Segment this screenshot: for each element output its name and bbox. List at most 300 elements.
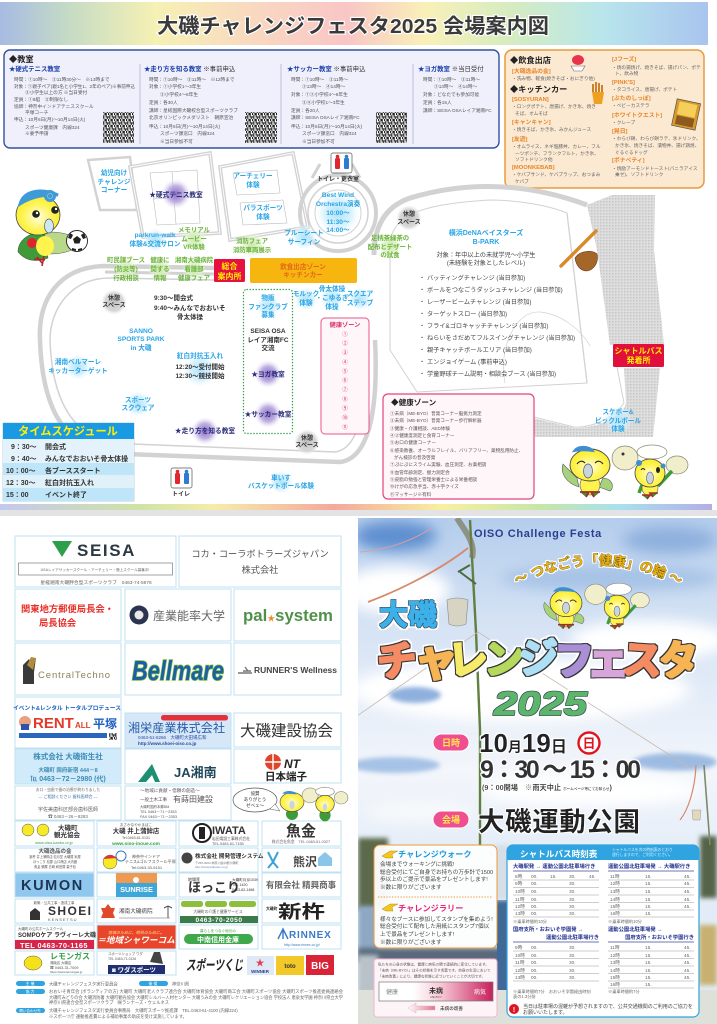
kitchen car heading: ◆キッチンカー xyxy=(510,85,567,94)
logo: Shinkine: 新杵 xyxy=(278,902,325,922)
table: Oiso station to park: 大磯駅発 → 運動公園北駐車場行き xyxy=(513,862,595,870)
health zone list: ②未病（ME-BYO）普発コーナー歩行解析器 xyxy=(390,417,482,424)
logo: Sports Toto group: スポーツくじ xyxy=(186,957,243,973)
table: park to Kofu branch: 45. xyxy=(684,945,691,950)
poster panel: challenge walk and rally xyxy=(374,845,497,948)
class: running xyxy=(144,64,238,145)
map label: tea and dessert: 足柄茶緑茶の xyxy=(371,233,409,242)
baseball stands xyxy=(587,195,664,345)
timetable note: シャトルバスを次の時刻表のとおり xyxy=(612,847,673,852)
map label: rest space 2: 休憩 xyxy=(301,434,313,442)
poster: Oiso title: 大磯 xyxy=(379,599,437,632)
logo: Shoei Sangyo: 0463-61-6266 大磯町大田場広和 xyxy=(138,734,207,741)
logo: Uokin xyxy=(272,822,330,844)
class: soccer: ②④小学校1〜3年生 xyxy=(302,99,345,106)
table: Oiso station to park: 9時 xyxy=(515,881,523,886)
map label: infant challenge corner xyxy=(98,168,131,194)
B-PARK activities list: ・ xyxy=(419,335,425,342)
table: Kofu branch to park: 10時 xyxy=(515,953,525,958)
logo: Oiso specialties association xyxy=(29,847,81,869)
health zone heading: ◆健康ゾーン xyxy=(391,397,437,407)
food heading: ◆飲食出店 xyxy=(510,55,551,65)
baseball ground xyxy=(374,187,624,427)
class: tennis: 時間：①10時〜 ②11時30分〜 ※13時まで xyxy=(14,76,110,83)
credit: organizer: 神奈川県 xyxy=(172,980,190,988)
logo: Kaihatsu Kanri System: http://www.kaihatsu.co.jp xyxy=(195,865,228,869)
logo: Rent All Hiratsuka: イベント&レンタル トータルプロデュース xyxy=(13,704,121,712)
credit: contact: ※スポーツ庁 運動推進費による補助事業の助成を受け実施しています。 xyxy=(49,1013,187,1020)
poster: Challenge Festa title xyxy=(375,636,701,686)
logo: Central Techno xyxy=(23,657,111,684)
map label: Bellmare kick target xyxy=(48,354,108,380)
table: park to Kofu branch: 13時 xyxy=(610,960,620,965)
poster panel: ME-BYO: 私たちの心身の状態は、健康と病気の間で連続的に変化しています。 xyxy=(378,962,489,966)
schedule heading: タイムスケジュール xyxy=(18,425,118,438)
class: running: 時間：①10時〜 ②11時〜 ※12時まで xyxy=(149,76,235,83)
logo: Chunan Shinkin xyxy=(184,928,253,944)
logo: Lemon Gas xyxy=(24,951,90,974)
table: Oiso station to park: 10時 xyxy=(515,889,525,894)
map label: fire fair xyxy=(233,232,272,258)
table: Oiso station to park: 11時 xyxy=(515,897,525,902)
map label: archery: 体験 xyxy=(246,180,260,189)
table: park to Oiso station: 16時 xyxy=(610,911,620,916)
panel: food and kitchen cars: ・オムライス、ネギ塩豚丼、カレー、フル xyxy=(512,143,601,150)
health zone list: ①未病（ME-BYO）普発コーナー脳挑力測定 xyxy=(390,410,482,417)
sponsor: Makita Kensetsu: 有蒔田建設 xyxy=(173,794,213,804)
map label: hospital fair xyxy=(175,255,214,282)
table: Oiso station to park: 00. xyxy=(531,881,538,886)
logo: Shoei Sangyo: http://www.shoei-oiso.co.jp xyxy=(138,741,197,746)
logo: Rent All Hiratsuka xyxy=(13,704,121,740)
logo: Iwata: TEL.0463-61-7155 xyxy=(212,842,244,846)
poster: venue: 会場 xyxy=(442,814,460,825)
mascots thanks bubble xyxy=(233,787,348,821)
table: park to Kofu branch: 16時 xyxy=(610,982,620,987)
logo: Sports Toto group: BIG xyxy=(311,961,329,972)
schedule rows: 15：00 xyxy=(6,492,29,499)
logo: Runner's Wellness: RUNNER'S Wellness xyxy=(254,665,337,675)
table: park to Oiso station: 13時 xyxy=(610,889,620,894)
poster: Challenge Festa title: タ xyxy=(657,637,701,685)
table: Kofu branch to park: 30. xyxy=(569,975,576,980)
class: tennis: ★硬式テニス教室 xyxy=(9,64,61,73)
poster: Challenge Festa title: ン xyxy=(484,638,524,682)
schedule rows: イベント終了 xyxy=(45,490,87,499)
map label: bottom toilet: トイレ xyxy=(172,491,190,498)
bamboo pole and streamers xyxy=(357,518,710,846)
map label: Bellmare kick target: キッカーターゲット xyxy=(48,366,108,375)
map panel: health zone numbers: ⑩ xyxy=(342,414,348,422)
traffic warning: お願いいたします。 xyxy=(523,1009,568,1016)
map label: opening ceremony times: 骨太体操 xyxy=(177,312,204,321)
map panel: health zone numbers: ⑧ xyxy=(342,395,348,403)
logo: Kumazawa xyxy=(268,852,332,869)
map label: parkrun: 体験&交流サロン xyxy=(130,239,181,248)
map label: para sports xyxy=(243,204,283,221)
table: park to Kofu branch: 国府支所・おおいそ学園行き xyxy=(625,933,694,941)
credit: organizer: 主 催 xyxy=(25,980,35,986)
map zone: green dotted area: 物販 xyxy=(261,293,275,302)
logo: Hokkori: 0463-62-1488 xyxy=(232,888,254,892)
logo: Oiso tourism association xyxy=(22,823,80,845)
time note: (9：00開場 ※雨天中止 ホームページ等にてお知らせ) xyxy=(482,783,612,792)
class: tennis: 協師：神奈中インドアテニススクール xyxy=(14,103,94,110)
map label: rest space 1: スペース xyxy=(102,302,126,309)
table: Oiso station to park: 8時 xyxy=(515,874,523,879)
B-PARK activities list: ・ xyxy=(419,347,425,354)
B-PARK activities list: ボールをつなごうダッシュチャレンジ (当日参加) xyxy=(427,286,563,294)
poster: venue xyxy=(433,807,640,837)
table: park to Oiso station: 45. xyxy=(684,881,691,886)
map label: bone exercise xyxy=(316,284,349,311)
walk text: 歩以上のご提示で景品をプレゼントします! xyxy=(380,875,488,883)
panel: food and kitchen cars: ・焼励アーモンドトースト(バニラアイス xyxy=(612,165,698,172)
map panel: health zone numbers: ⑦ xyxy=(342,386,348,394)
map label: skateboard and pickleball: スケボー& xyxy=(602,407,634,416)
logo: NT Nihon Tanshi xyxy=(265,754,307,783)
logo: Shoei Sangyo xyxy=(128,715,228,746)
map label: skateboard and pickleball: 体験 xyxy=(611,424,625,433)
sponsor: dental association: ― ご相談ください 歯科医師会 ― xyxy=(38,793,98,799)
sponsor: dental association: お口・虫歯で歯の治療が終わりました xyxy=(36,787,100,792)
logo: Sompo Care: 大磯町の公共ホームスクール xyxy=(18,926,64,931)
lower stands xyxy=(533,368,660,437)
logo: Oiso Eiseisha: 大磯町 国府新宿 444－8 xyxy=(38,766,98,774)
table: park to Oiso station: 45. xyxy=(684,897,691,902)
B-PARK panel: 横浜DeNAベイスターズ xyxy=(449,228,523,237)
map label: molkky: 体験 xyxy=(299,298,313,307)
logo: Chunan Shinkin: 暮らしをつなぐ地元の xyxy=(200,928,236,933)
map panel: health zone numbers: ⑤ xyxy=(342,367,348,375)
class: soccer: 時間：①10時〜 ②11時〜 xyxy=(291,76,348,83)
table: Kofu branch to park: 30. xyxy=(569,945,576,950)
table: Oiso station to park: 30. xyxy=(569,881,576,886)
panel: food and kitchen cars: ケバブ xyxy=(515,178,529,184)
class: soccer: ★サッカー教室 ※事前申込 xyxy=(287,64,366,73)
logo: Oiso specialties association: 新杵 井上蒲鉾店 松月堂 大磯屋 米屋 xyxy=(29,854,81,859)
panel: food and kitchen cars: かき氷、焼きそば、漬物丼、揚げ鶏焼、 xyxy=(615,142,699,149)
logo: Sports Toto group: toto xyxy=(284,964,296,970)
logo: NT Nihon Tanshi: 日本端子 xyxy=(265,770,307,783)
B-PARK activities list: エンジョイゲーム (事前申込) xyxy=(427,358,507,366)
map label: parkrun: parkrun-walk xyxy=(134,232,176,239)
map label: archery xyxy=(233,172,273,189)
logo: SEISA: SEISA xyxy=(77,541,136,560)
class: running: 申込：10月6日(月)〜10月14日(火) xyxy=(149,123,221,130)
map label: red white ball toss: 紅白対抗玉入れ xyxy=(177,351,223,360)
logo: Oiso Construction Association: 大磯建設協会 xyxy=(240,722,333,740)
table: park to Kofu branch: 15. xyxy=(645,945,652,950)
panel: food and kitchen cars xyxy=(505,50,704,188)
panel: food and kitchen cars: ・ケバブサンド、ケバブラップ、おつまみ xyxy=(512,171,601,178)
basket on pole xyxy=(447,598,468,626)
improvement arrow: 未病の改善 xyxy=(440,1005,463,1012)
date badge xyxy=(433,734,469,751)
credit: contact: 問い合わせ先 xyxy=(19,1008,41,1013)
logo: Hokkori: 地場産 xyxy=(188,876,200,882)
table: Kofu branch to park: 運動公園北駐車場行き xyxy=(546,933,599,941)
class: yoga: 講師：SEISA OSAレイア湘南FC xyxy=(423,107,492,114)
map label: health info: 関する xyxy=(150,265,170,273)
logo: Uokin: 魚金 xyxy=(286,822,316,840)
map label: Best Wind Orchestra: 11:30〜 xyxy=(326,219,350,226)
logo: Hokkori: TEL 1420 xyxy=(232,883,247,887)
classes heading: ◆教室 xyxy=(9,54,34,64)
logo: NT Nihon Tanshi: NT xyxy=(284,757,302,771)
poster: date and time xyxy=(433,728,641,792)
icon: fries xyxy=(592,82,604,104)
B-PARK activities list: ・ xyxy=(419,299,425,306)
sponsor: Makita Kensetsu: FAX 0463－71－2353 xyxy=(140,815,177,819)
table: Oiso station to park: 13時 xyxy=(515,911,525,916)
credit: cooperation: 協 力 xyxy=(25,988,35,994)
logo: Iwata: 岩田電設工事株式会社 xyxy=(212,836,250,841)
mascot: small bird xyxy=(280,791,304,820)
map label: Sanno Sports Park xyxy=(117,328,165,352)
map label: Best Wind Orchestra: 14:00〜 xyxy=(326,227,350,234)
map panel: health zone numbers: ⑪ xyxy=(342,423,348,431)
map label: square step: ステップ xyxy=(347,299,374,307)
table: park to Oiso station: ※乗車時間約10分 xyxy=(608,918,643,925)
table: park to Oiso station: 15. xyxy=(645,904,652,909)
walk heading: チャレンジウォーク xyxy=(398,849,472,859)
poster: background photo xyxy=(340,518,717,1024)
mascots thanks bubble: ありがとう xyxy=(244,796,266,803)
map label: red white ball toss: 12:20〜受付開始 xyxy=(175,362,225,371)
map label: memorial movie: VR体験 xyxy=(183,242,205,251)
credit: contact xyxy=(16,1007,238,1020)
class: soccer: 申込：10月6日(月)〜10月14日(火) xyxy=(291,123,363,130)
table: Oiso station to park: 12時 xyxy=(515,904,525,909)
map label: memorial movie: ムービー xyxy=(181,234,207,243)
map label: shuttle bus stop xyxy=(613,344,664,367)
panel: food and kitchen cars: ・焼の揚焼げ、焼きそば、揚げパン、ポテ xyxy=(612,64,701,71)
table: Kofu branch to park: 00. xyxy=(531,975,538,980)
schedule rows: 10：00〜 xyxy=(6,468,36,475)
logo: Uokin: 株式会社魚金 TEL.0463-61-0327 xyxy=(272,839,330,844)
health zone list: ⑧血管年齢測定、握力測定会 xyxy=(390,469,450,476)
poster mascot: with hat xyxy=(585,583,649,629)
map label: bone exercise: ・こゆるぎ xyxy=(316,293,349,302)
poster panel: shuttle bus timetable xyxy=(507,845,699,1017)
B-PARK panel: 対象：年中以上の未就学児〜小学生 xyxy=(436,251,536,259)
B-PARK activities list: ・ xyxy=(419,323,425,330)
logo: Inoue Kamaboko: 大磯 井上蒲鉾店 xyxy=(113,826,160,835)
B-PARK panel: (未経験を対象としたレベル) xyxy=(447,259,525,267)
poster panel: ME-BYO: 「未病（ME-BYO）」はその状態を示す言葉です。自身の生活において xyxy=(378,968,491,972)
walk text: 会場までウォーキングに挑戦! xyxy=(380,860,455,868)
B-PARK panel xyxy=(419,228,575,378)
rally text: 上で景品をプレゼントします! xyxy=(380,930,455,938)
panel: food and kitchen cars: ぐるぐるドッグ xyxy=(615,149,648,156)
logo: Kanto postmasters: 関東地方郵便局長会・ xyxy=(21,603,114,614)
class: tennis: ※要予申請 xyxy=(25,130,49,137)
sheet divider xyxy=(0,510,717,516)
schedule rows: 紅白対抗玉入れ xyxy=(45,478,94,487)
panel: food and kitchen cars: ・洗み物、軽食(焼きそば・おにぎり他) xyxy=(512,75,595,82)
footer credits xyxy=(16,980,344,1020)
credit: cooperation: 大磯町みどりの会 大磯消防署 大磯町観光協会 大磯町シルバー人材センター 大磯うみの会 大磯町レクリエーション協会 学校法人 恵泉女学園 神奈川県立大学 xyxy=(49,994,344,1001)
table: park to Oiso station: 15. xyxy=(645,911,652,916)
map label: town booths: 行政相談 xyxy=(113,273,139,282)
table: Kofu branch to park xyxy=(513,925,599,1000)
panel: food and kitchen cars: ・タコライス、唐揚げ、ポテト xyxy=(612,86,677,93)
logo: Inoue Kamaboko: おさかなやかまぼこ xyxy=(120,822,152,827)
traffic warning xyxy=(509,1003,693,1016)
rally text: 総合受付にて配布した用紙にスタンプ7個以 xyxy=(380,922,490,930)
table: park to Oiso station: 15. xyxy=(645,881,652,886)
panel: time schedule xyxy=(3,423,134,501)
logo: Central Techno: CentralTechno xyxy=(38,670,111,681)
poster: Challenge Festa title: チ xyxy=(375,638,419,686)
table: Kofu branch to park: 00. xyxy=(531,960,538,965)
logo: Shinkine xyxy=(266,902,325,922)
panel: food and kitchen cars: [PINK'S] xyxy=(612,80,635,86)
map label: infant challenge corner: チャレンジ xyxy=(98,178,131,186)
logo: Oiso tourism association: www.oiso-kanko.or.jp xyxy=(35,840,74,845)
map label: tea and dessert xyxy=(368,233,412,259)
timetable note xyxy=(612,847,673,857)
map label: red white ball toss: 12:30〜競技開始 xyxy=(175,371,225,380)
logo: green phone band: 大磯町の介護と健康サービス xyxy=(193,909,243,914)
map label: skateboard and pickleball: ピックルボール xyxy=(595,416,641,425)
panel: classes xyxy=(4,50,499,148)
logo: pal system: pal★system xyxy=(243,606,333,625)
map panel: health zone numbers: ⑥ xyxy=(342,376,348,384)
map zone: green dotted area: SEISA OSA xyxy=(250,328,286,335)
map label: rest space 2 xyxy=(294,429,320,455)
class: yoga: ③13時〜 ④14時〜 xyxy=(434,83,478,90)
map zone: green dotted area: 募集 xyxy=(261,310,275,319)
logo: Kaihatsu Kanri System: 株式会社 開発管理システム xyxy=(195,852,264,860)
map label: wheelchair basketball: バスケットボール体験 xyxy=(248,481,314,490)
map label: food zone: キッチンカー xyxy=(283,271,323,279)
table: Kofu branch to park: 00. xyxy=(531,968,538,973)
table: park to Kofu branch: 15. xyxy=(645,968,652,973)
map label: fire fair: 消防車両展示 xyxy=(233,245,272,254)
logo: JA Shonan: JA湘南 xyxy=(174,765,217,780)
map label: red white ball toss xyxy=(175,351,225,387)
poster: Challenge Festa title: ジ xyxy=(517,636,560,682)
logo: Iwata: IWATA xyxy=(212,825,246,837)
class: tennis: 対象：①親子ペア(親1名と小学生1、2年のペア)※事前申込 xyxy=(14,83,135,90)
logo: Sanno University xyxy=(130,606,225,624)
poster: Challenge Festa title: フ xyxy=(554,639,594,683)
panel: food and kitchen cars: [Jフーズ] xyxy=(612,55,636,63)
health zone list xyxy=(390,410,523,498)
rally text: 様々なブースに参加してスタンプを集めよう! xyxy=(380,915,493,923)
class: running: ★走り方を知る教室 ※事前申込 xyxy=(144,64,236,73)
logo: Oiso Eiseisha: ℡ 0463－72－2980 (代) xyxy=(30,775,106,783)
table: Oiso station to park: ※乗車時間約10分 xyxy=(513,918,548,925)
map label: running class: ★走り方を知る教室 xyxy=(175,426,235,435)
small basket xyxy=(692,810,701,820)
B-PARK activities list xyxy=(419,274,575,378)
table: Oiso station to park: 45. xyxy=(589,874,596,879)
class: yoga: 時間：①10時〜 ②11時〜 xyxy=(423,76,480,83)
logo: Oiso specialties association: ほっこり 松屋 山口商店 大内館 xyxy=(33,859,78,864)
logo: Kanto postmasters xyxy=(21,603,114,628)
panel: food and kitchen cars: [晃日] xyxy=(612,127,628,135)
schedule rows: 12：30〜 xyxy=(6,480,36,487)
credit: organizer: 大磯チャレンジフェスタ実行委員会 xyxy=(49,980,118,988)
B-PARK activities list: フライ&ゴロキャッチチャレンジ (当日参加) xyxy=(427,322,548,330)
table: Kofu branch to park: 国府支所・おおいそ学園発 → xyxy=(513,925,583,933)
schedule rows: 各ブーススタート xyxy=(45,466,101,475)
map label: blue sheet surfing: ブルーシート xyxy=(284,228,324,237)
traffic warning: 当日は駐車場の混雑が予想されますので、公共交通機関のご利用のご協力を xyxy=(523,1003,693,1010)
table: Kofu branch to park: 11時 xyxy=(515,960,525,965)
B-PARK activities list: ねらいをさだめてフルスイングチャレンジ (当日参加) xyxy=(427,334,575,342)
panel: food and kitchen cars: そば、オムそば xyxy=(515,110,548,117)
map zone: green dotted area: 交流 xyxy=(262,343,275,352)
time: 9：30 ～ 15：00 xyxy=(480,756,641,784)
health zone list: ⑨皮脂の勉強と管理栄養士による栄養相談 xyxy=(390,476,478,483)
map label: infant challenge corner: コーナー xyxy=(101,186,127,194)
table: park to Oiso station: 12時 xyxy=(610,881,620,886)
map panel: health zone numbers: 健康ゾーン xyxy=(330,321,360,329)
map panel: health zone numbers: ② xyxy=(342,339,348,347)
table: Oiso station to park: 00. xyxy=(531,889,538,894)
logo: green phone band: 0463-70-2050 xyxy=(195,917,243,924)
schedule rows: 9：30〜 xyxy=(11,444,37,451)
logo: Hokkori xyxy=(188,876,258,895)
B-PARK activities list: ・ xyxy=(419,371,425,378)
table: Kofu branch to park: 13時 xyxy=(515,975,525,980)
poster panel: ME-BYO: 「未病改善」により、健康な状態に近づいていくことが大切です。 xyxy=(378,974,485,978)
health zone list: ⑥感染教養、オーラルフレイル、バリアフリー、薬物乱用防止、 xyxy=(390,447,523,454)
Sunday mark xyxy=(578,732,600,754)
map label: hospital fair: 看護部 xyxy=(184,264,204,273)
map label: bottom toilet xyxy=(171,468,192,498)
logo: Sports Toto group: ★ xyxy=(255,958,265,968)
poster: slogan: ～ つなごう「健康」の輪 ～ xyxy=(514,552,684,583)
map panel: health zone numbers: ③ xyxy=(342,348,348,356)
map label: tennis class xyxy=(149,179,203,209)
map label: memorial movie xyxy=(178,226,211,251)
map panel: health zone numbers: ④ xyxy=(342,358,348,366)
logo: Shinkine: 大磯町 xyxy=(266,906,278,911)
map zone: green dotted area: ★ヨガ教室 xyxy=(251,370,285,378)
mascots thanks bubble: 協賛 xyxy=(250,790,260,797)
table: Kofu branch to park: 30. xyxy=(569,968,576,973)
panel: food and kitchen cars: ・ロングポテト、唐揚げ、かき氷、焼き xyxy=(512,103,596,110)
class: running: 北京オリンピックメダリスト 朝原宣治 xyxy=(149,114,234,121)
logo: Kumon: KUMON xyxy=(21,878,84,894)
class: running: 講師：星槎国際大磯校合型スポーツクラブ xyxy=(149,107,238,114)
poster: English title: OISO Challenge Festa xyxy=(474,528,602,540)
logo: tennis school: テニス&ゴルフスクール平塚 xyxy=(125,858,176,864)
map label: skateboard and pickleball xyxy=(595,406,641,434)
panel: food and kitchen cars: ・焼きそば、かき氷、みかんジュース xyxy=(512,126,591,133)
schedule rows xyxy=(6,442,128,499)
map label: town booths: (防災等) xyxy=(114,264,138,273)
logo: SEISA xyxy=(18,541,172,586)
class: running: スポーツ課窓口 内線324 xyxy=(160,130,215,137)
logo: green phone band xyxy=(180,901,258,924)
table: park to Oiso station: 運動公園北駐車場発 → 大磯駅行き xyxy=(608,862,690,870)
map label: infant challenge corner: 幼児向け xyxy=(101,168,128,177)
sponsor: Makita Kensetsu: 大磯町国府本郷854 xyxy=(140,804,170,809)
map label: wheelchair basketball: 車いす xyxy=(271,473,291,482)
panel: food and kitchen cars: ーツポンチ、フランクフルト、かき氷、 xyxy=(515,150,599,157)
B-PARK activities list: レーザービームチャレンジ (当日参加) xyxy=(427,298,531,306)
poster: Challenge Festa title: レ xyxy=(446,636,490,684)
table: Kofu branch to park: ※乗車時間約7分 おおいそ学園経由時刻 xyxy=(513,988,591,995)
logo: Sports Toto group: WINNER xyxy=(251,969,270,974)
logo: Oiso specialties association: 大磯逸品の会 xyxy=(38,847,72,855)
